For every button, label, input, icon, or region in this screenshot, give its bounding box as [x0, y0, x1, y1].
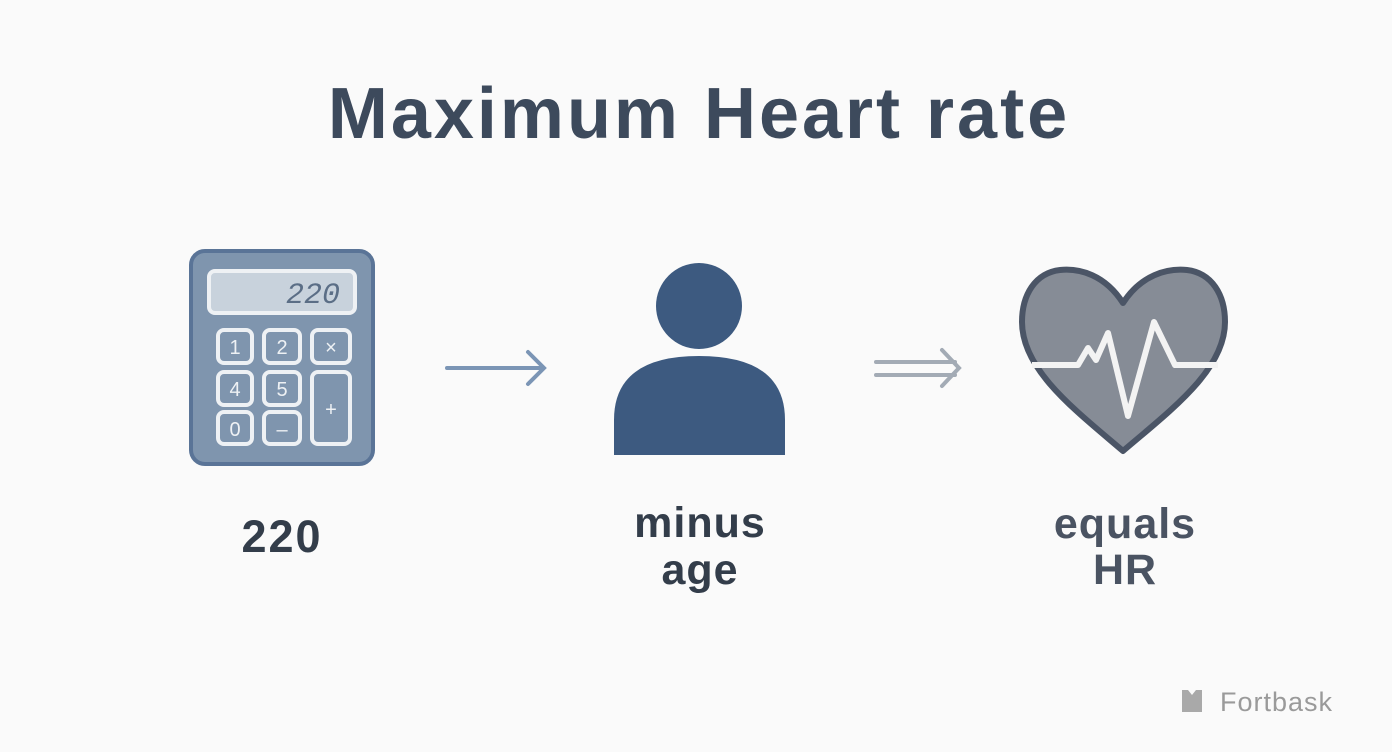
- arrow: double: [876, 350, 959, 386]
- arrow: single: [447, 352, 544, 384]
- icon: calculator: 220: [286, 279, 340, 313]
- icon: calculator: 0: [229, 419, 241, 441]
- icon: calculator: –: [276, 419, 288, 441]
- icon: calculator: [191, 251, 373, 464]
- label: minus age: age: [661, 546, 739, 594]
- icon: calculator: +: [325, 399, 337, 421]
- icon: calculator: 4: [229, 379, 241, 401]
- icon: heart: [1022, 270, 1225, 451]
- logo: Fortbask: Fortbask: [1220, 687, 1333, 717]
- icon: calculator: 2: [276, 337, 288, 359]
- icon: calculator: 1: [229, 337, 241, 359]
- icon: person: [614, 263, 785, 455]
- icon: calculator: 5: [276, 379, 288, 401]
- label: 220: 220: [241, 511, 323, 562]
- label: equals HR: HR: [1093, 546, 1157, 594]
- label: equals HR: equals: [1054, 500, 1196, 548]
- title: Maximum Heart rate: [328, 74, 1070, 154]
- label: minus age: minus: [634, 499, 766, 547]
- icon: calculator: ×: [325, 337, 337, 359]
